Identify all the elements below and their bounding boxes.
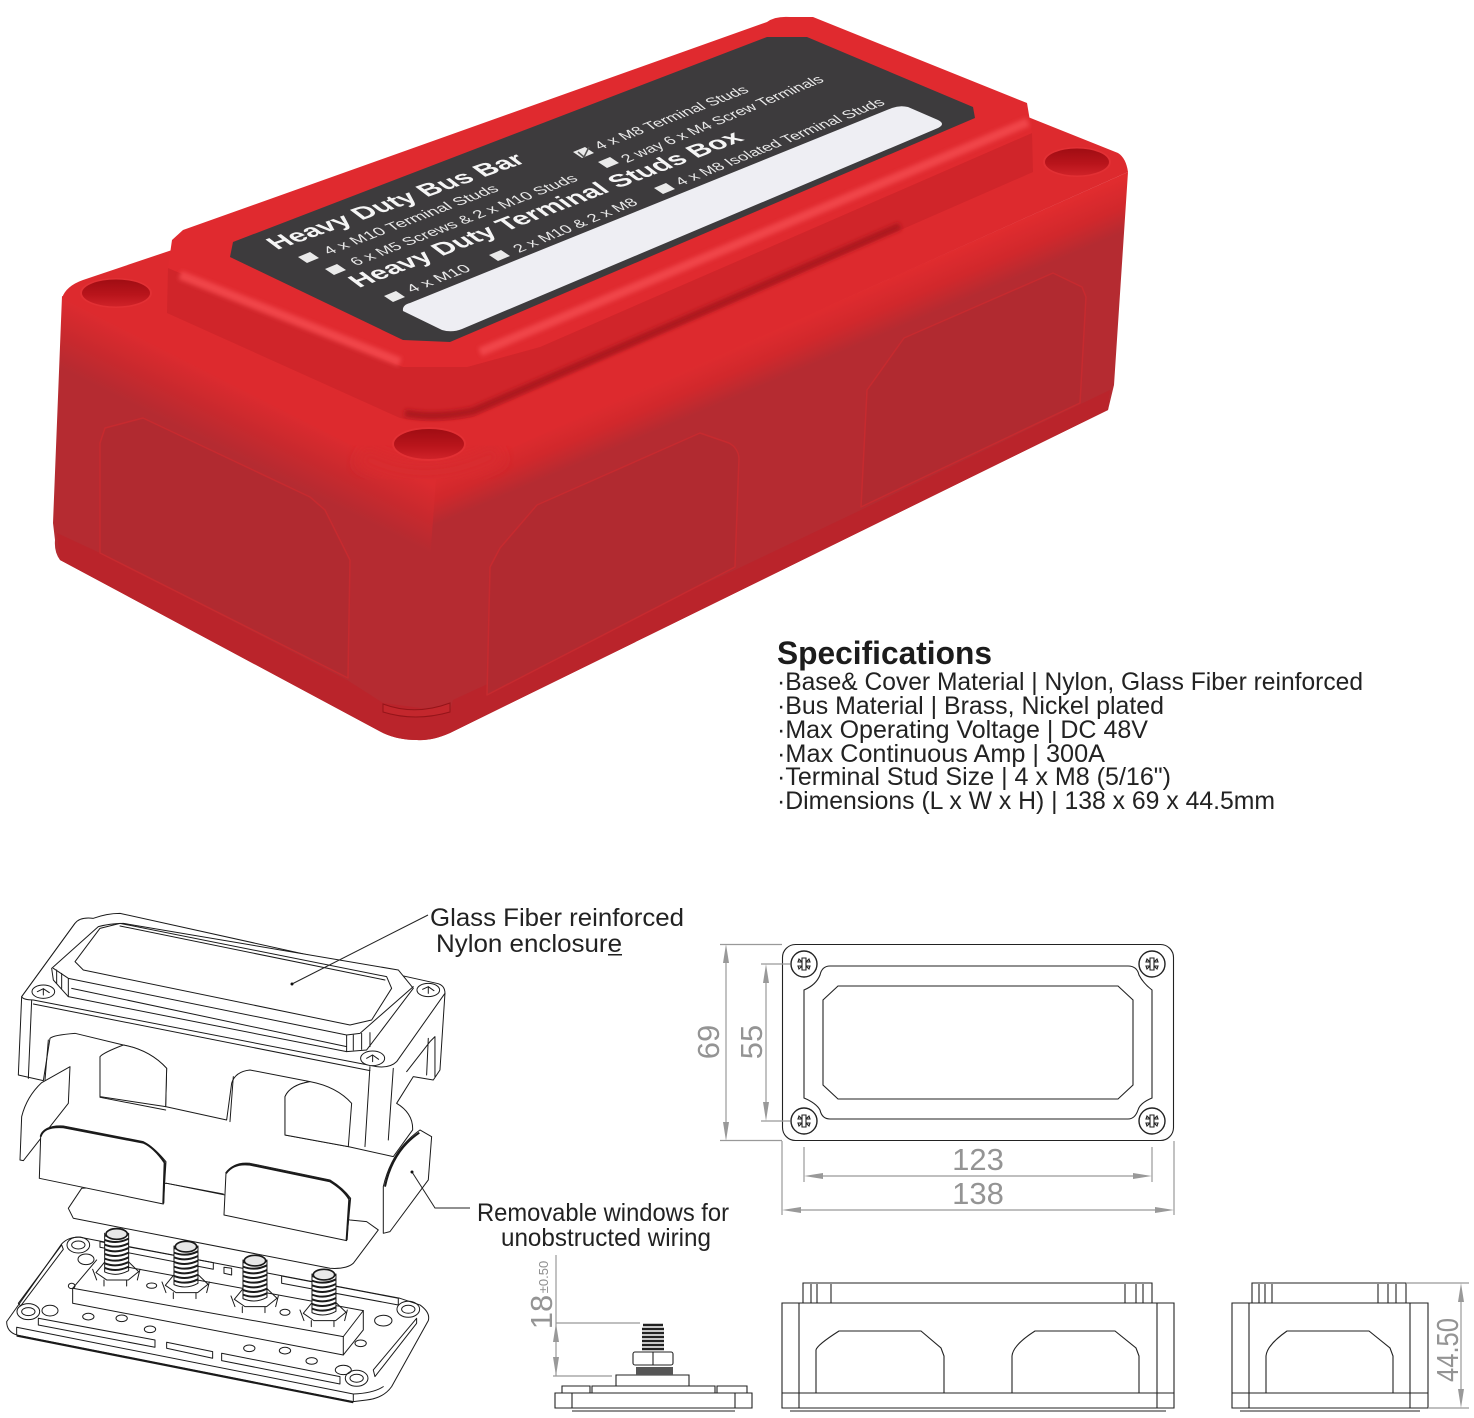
- checkboxes: [298, 147, 675, 302]
- specifications list: ·Max Operating Voltage | DC 48V: [777, 716, 1148, 744]
- label heading: Heavy Duty Terminal Studs Box: Heavy Duty Terminal Studs Box: [342, 127, 750, 291]
- rounded corner highlight: [360, 452, 500, 473]
- label text lines: 4 x M10: [402, 262, 475, 295]
- product photo: red terminal studs box: [53, 17, 1128, 740]
- dimension 18 +/-0.50: ±0.50: [536, 1261, 551, 1293]
- callout: glass fiber reinforced nylon enclosure: [290, 904, 684, 986]
- label heading: Heavy Duty Bus Bar: Heavy Duty Bus Bar: [261, 150, 532, 253]
- lid side shadow: [405, 226, 900, 416]
- specifications list: ·Max Continuous Amp | 300A: [777, 740, 1105, 768]
- dimension 138: 138: [952, 1176, 1004, 1211]
- top view drawing with dimensions: [691, 944, 1174, 1215]
- base and block: [555, 1375, 752, 1411]
- dimension 123: [804, 1142, 1152, 1182]
- corner screws: [791, 951, 1165, 1134]
- label recess: [823, 986, 1133, 1099]
- dimension 138: [782, 1141, 1174, 1215]
- gasket sheet: [68, 1183, 378, 1268]
- lid side faces: [167, 133, 1033, 421]
- specifications list: ·Base& Cover Material | Nylon, Glass Fiber reinforced: [777, 668, 1363, 696]
- thick edges on windows: [41, 1127, 419, 1240]
- side view: stud with dimension: [524, 1255, 752, 1411]
- box right face: [417, 172, 1128, 740]
- window panel middle: [487, 433, 739, 695]
- box left face: [53, 296, 445, 740]
- label text lines: 4 x M8 Isolated Terminal Studs: [672, 96, 889, 188]
- dimension 55: [734, 964, 790, 1121]
- end view window: [1266, 1331, 1393, 1393]
- leader line to window: [410, 1170, 470, 1208]
- dimension 18 +/-0.50: [524, 1255, 640, 1376]
- bottom lip: [57, 390, 1110, 740]
- specifications list: ·Dimensions (L x W x H) | 138 x 69 x 44.5mm: [777, 787, 1275, 815]
- outer outline: [782, 944, 1174, 1140]
- stud and nuts: [633, 1325, 673, 1375]
- dimension 18 +/-0.50: 18: [524, 1295, 559, 1329]
- box top face: [62, 117, 1128, 479]
- seam pad: [383, 703, 450, 717]
- removable window front left: [39, 1126, 166, 1204]
- label text lines: 2 way 6 x M4 Screw Terminals: [618, 73, 828, 165]
- mounting holes: [80, 147, 1111, 461]
- removable window front right: [224, 1163, 351, 1241]
- front view: [782, 1283, 1174, 1411]
- label text lines: 4 x M8 Terminal Studs: [590, 84, 753, 152]
- dimension 123: 123: [952, 1142, 1004, 1177]
- lid ring: [804, 966, 1152, 1119]
- label text lines: 2 x M10 & 2 x M8: [510, 196, 642, 255]
- terminal studs: [93, 1229, 347, 1327]
- window panel right: [861, 273, 1086, 507]
- callout: removable windows: [410, 1170, 729, 1252]
- enclosure body: [18, 923, 445, 1157]
- specifications: [777, 635, 1363, 815]
- dimension 44.50: [1406, 1283, 1469, 1408]
- base plate: [7, 1229, 429, 1402]
- callout: removable windows: unobstructed wiring: [501, 1224, 711, 1252]
- callout: removable windows: Removable windows for: [477, 1199, 729, 1227]
- specifications list: ·Terminal Stud Size | 4 x M8 (5/16"): [777, 763, 1171, 791]
- callout: glass fiber reinforced nylon enclosure: Glass Fiber reinforced: [430, 904, 684, 932]
- dimension 69: 69: [691, 1025, 726, 1059]
- lid rim highlight: [180, 122, 1028, 362]
- removable window right side: [383, 1130, 432, 1233]
- dimension 69: [691, 944, 782, 1141]
- label text lines: 6 x M5 Screws & 2 x M10 Studs: [346, 172, 582, 268]
- front view windows: [816, 1331, 1139, 1393]
- leader line to enclosure: [290, 915, 428, 986]
- callout: glass fiber reinforced nylon enclosure: Nylon enclosure: [436, 930, 622, 958]
- white write-on strip: [403, 106, 942, 331]
- dark label: [230, 37, 975, 342]
- specifications heading: Specifications: [777, 635, 992, 671]
- lid top face: [168, 17, 1032, 367]
- check mark: [578, 147, 589, 157]
- exploded view drawing: [7, 913, 445, 1402]
- removable window left side: [20, 1067, 70, 1161]
- specifications list: [777, 668, 1363, 815]
- lid top: [22, 913, 445, 1067]
- end view with dimension: [1232, 1283, 1469, 1411]
- specifications list: ·Bus Material | Brass, Nickel plated: [777, 692, 1164, 720]
- dimension 55: 55: [734, 1025, 769, 1059]
- dimension 44.50: 44.50: [1430, 1318, 1465, 1382]
- window panel left: [100, 418, 350, 678]
- label text lines: 4 x M10 Terminal Studs: [319, 182, 503, 257]
- label text lines: [319, 73, 889, 295]
